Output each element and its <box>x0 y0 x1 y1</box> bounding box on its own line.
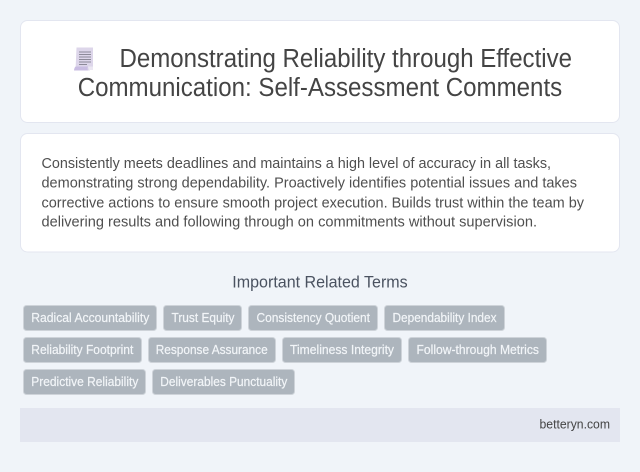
chip: Radical Accountability <box>24 306 156 330</box>
chip: Reliability Footprint <box>24 338 142 362</box>
chip: Trust Equity: Trust Equity <box>172 311 235 325</box>
chip: Deliverables Punctuality <box>152 370 294 394</box>
title <box>78 45 572 102</box>
term chips <box>24 306 546 394</box>
summary paragraph <box>42 156 585 230</box>
chip: Radical Accountability: Radical Accountability <box>31 311 150 325</box>
panel: title card <box>20 20 620 122</box>
chip: Dependability Index: Dependability Index <box>392 311 497 325</box>
footer bar <box>20 408 620 442</box>
chip: Reliability Footprint: Reliability Footprint <box>31 343 134 357</box>
chip: Timeliness Integrity <box>282 338 402 362</box>
chip: Consistency Quotient: Consistency Quotient <box>256 311 370 325</box>
chip: Consistency Quotient <box>248 306 378 330</box>
chip: Deliverables Punctuality: Deliverables Punctuality <box>160 375 288 389</box>
chip: Timeliness Integrity: Timeliness Integrity <box>290 343 395 357</box>
footer source text: betteryn.com <box>540 418 610 432</box>
chip: Follow-through Metrics <box>408 338 546 362</box>
summary paragraph: demonstrating strong dependability. Proactively identifies potential issues and takes <box>42 176 577 192</box>
summary paragraph: Consistently meets deadlines and maintains a high level of accuracy in all tasks, <box>42 156 551 172</box>
panel: summary text card <box>20 134 620 252</box>
heading: important related terms: Important Related Terms <box>232 273 408 291</box>
chip: Predictive Reliability: Predictive Reliability <box>31 375 139 389</box>
summary paragraph: corrective actions to ensure smooth project execution. Builds trust within the team by <box>42 195 585 211</box>
title: Communication: Self-Assessment Comments <box>78 74 562 102</box>
chip: Response Assurance <box>148 338 276 362</box>
chip: Response Assurance: Response Assurance <box>156 343 268 357</box>
chip: Dependability Index <box>384 306 504 330</box>
title: Demonstrating Reliability through Effective <box>120 45 572 73</box>
chip: Trust Equity <box>164 306 242 330</box>
summary paragraph: delivering results and following through on commitments without supervision. <box>42 214 537 230</box>
icon: scroll document <box>74 48 93 70</box>
chip: Predictive Reliability <box>24 370 146 394</box>
chip: Follow-through Metrics: Follow-through Metrics <box>416 343 539 357</box>
